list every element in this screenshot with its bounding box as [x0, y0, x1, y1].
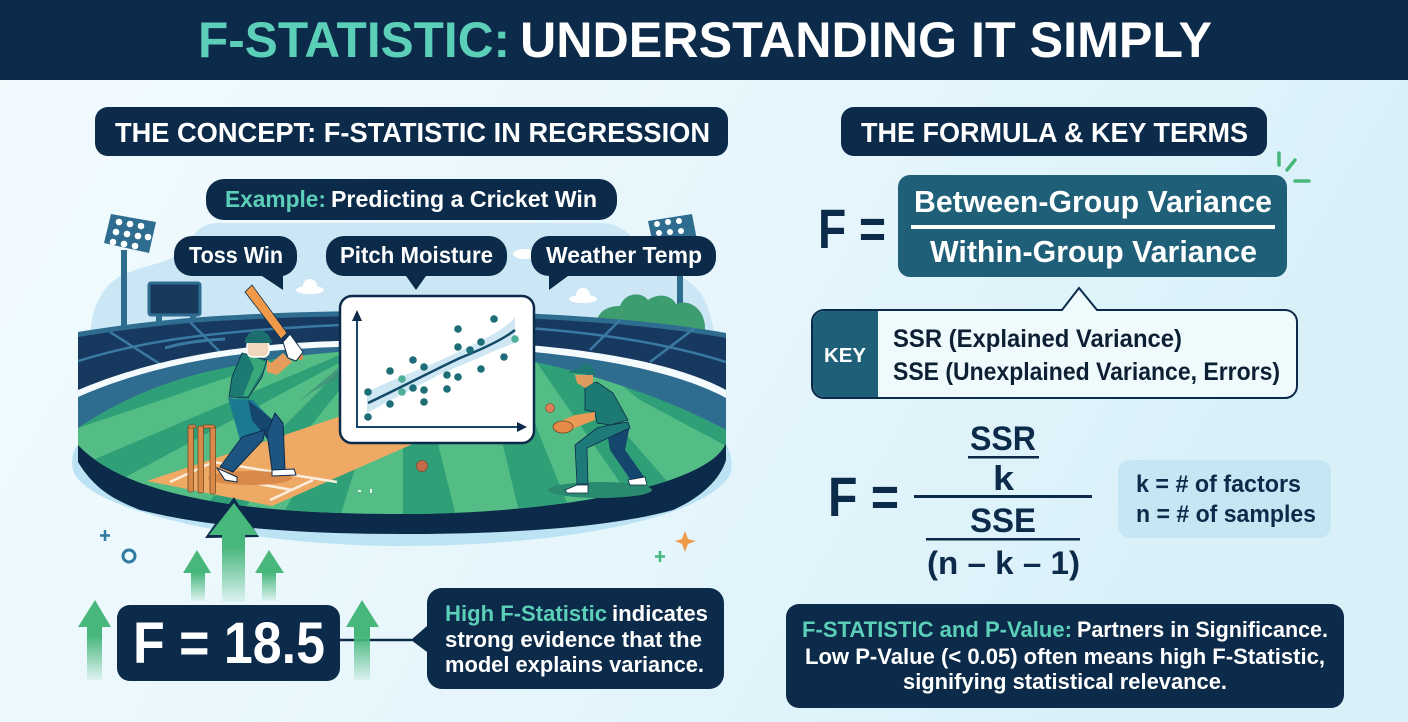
arms	[563, 412, 595, 429]
explanation callout: indicates	[612, 601, 708, 626]
wickets	[188, 425, 216, 494]
bottom note: f-statistic and p-value: Low P-Value (< 0.05) often means high F-Statistic,	[805, 644, 1325, 669]
head	[575, 375, 593, 388]
example pill: Predicting a Cricket Win	[331, 186, 597, 212]
right floodlight	[648, 214, 697, 332]
title banner: F-STATISTIC:	[198, 12, 510, 68]
bottom note: f-statistic and p-value	[786, 604, 1344, 708]
face guard	[247, 340, 269, 357]
clouds	[296, 249, 597, 303]
variable legend: k = # of factors	[1136, 471, 1301, 498]
outer arrows	[78, 600, 111, 680]
trend line	[368, 330, 515, 403]
front leg	[575, 422, 630, 484]
key box: SSE (Unexplained Variance, Errors)	[893, 358, 1280, 386]
conceptual formula: Between-Group Variance	[914, 184, 1272, 219]
leg pads	[220, 430, 265, 472]
accent ticks	[1279, 153, 1309, 181]
axes	[357, 315, 520, 427]
title banner	[0, 0, 1408, 80]
heading: the concept: THE CONCEPT: F-STATISTIC IN REGRESSION	[115, 117, 710, 148]
sky backdrop	[90, 223, 714, 340]
computational formula: F =	[828, 465, 899, 528]
white boundary ring	[78, 340, 726, 398]
ground shadow	[548, 482, 652, 498]
key box: KEY	[824, 345, 867, 367]
stadium illustration	[70, 214, 740, 546]
front leg	[248, 400, 285, 440]
trees	[596, 294, 705, 330]
bat	[245, 285, 287, 339]
back leg	[228, 398, 272, 440]
left floodlight	[104, 214, 156, 332]
torso	[585, 382, 628, 425]
explanation callout: High F-Statistic	[445, 601, 607, 626]
batter	[217, 285, 303, 482]
confidence band	[367, 317, 515, 413]
heading: the formula and key terms: THE FORMULA & KEY TERMS	[861, 117, 1248, 148]
striped field	[78, 352, 726, 514]
rising arrows	[78, 497, 379, 680]
bottom note: f-statistic and p-value: Partners in Significance.	[1077, 617, 1328, 642]
helmet	[245, 330, 272, 343]
callout: weather temp	[531, 236, 716, 290]
stands	[78, 311, 726, 430]
small field marks	[358, 489, 371, 493]
dark seating	[78, 316, 726, 392]
conceptual formula: Within-Group Variance	[930, 234, 1257, 269]
scoreboard	[149, 283, 200, 324]
gloves	[283, 334, 303, 361]
callout: pitch moisture	[326, 236, 507, 290]
computational formula: SSR	[970, 420, 1036, 458]
title banner: UNDERSTANDING IT SIMPLY	[520, 12, 1212, 68]
arms	[267, 353, 292, 375]
data points	[364, 315, 508, 421]
computational formula	[828, 420, 1092, 581]
decorative sparkles left	[100, 530, 135, 562]
conceptual formula	[818, 175, 1287, 277]
ball on ground	[416, 460, 428, 472]
explanation callout: model explains variance.	[445, 652, 704, 677]
navy rim	[78, 425, 726, 534]
variable legend	[1118, 460, 1331, 538]
shoes	[217, 468, 296, 482]
scatter plot	[340, 296, 534, 443]
small arrows	[183, 550, 211, 601]
example pill: Example:	[225, 186, 326, 212]
halo under stadium	[72, 445, 732, 546]
back leg	[608, 425, 645, 479]
connector line	[340, 639, 412, 641]
computational formula: (n – k – 1)	[927, 545, 1080, 581]
example pill	[206, 179, 617, 220]
callout: toss win: Toss Win	[189, 242, 283, 268]
key box	[812, 288, 1297, 398]
shoes	[565, 477, 647, 493]
computational formula: SSE	[970, 502, 1036, 540]
ball in air	[546, 404, 554, 412]
cap	[568, 364, 595, 375]
decorative sparkles right	[655, 531, 696, 562]
explanation callout	[411, 588, 724, 689]
f value box: F = 18.5	[133, 611, 325, 676]
callout: pitch moisture: Pitch Moisture	[340, 242, 493, 268]
dust trail	[298, 368, 338, 402]
big center arrow	[205, 497, 259, 538]
heading: the concept	[95, 107, 728, 156]
pitch	[147, 413, 415, 506]
fielder	[548, 364, 652, 498]
conceptual formula: F =	[818, 197, 886, 260]
heading: the formula and key terms	[841, 107, 1267, 156]
variable legend: n = # of samples	[1136, 501, 1316, 528]
torso	[229, 353, 267, 398]
key box: SSR (Explained Variance)	[893, 325, 1182, 353]
bottom note: f-statistic and p-value: signifying statistical relevance.	[903, 669, 1227, 694]
callout: toss win	[174, 236, 297, 290]
explanation callout: strong evidence that the	[445, 627, 702, 652]
seating dividers	[78, 320, 726, 364]
computational formula: k	[993, 460, 1014, 498]
gloves	[553, 421, 573, 433]
callout: weather temp: Weather Temp	[546, 242, 702, 268]
bottom note: f-statistic and p-value: F-STATISTIC and P-Value:	[802, 617, 1072, 642]
